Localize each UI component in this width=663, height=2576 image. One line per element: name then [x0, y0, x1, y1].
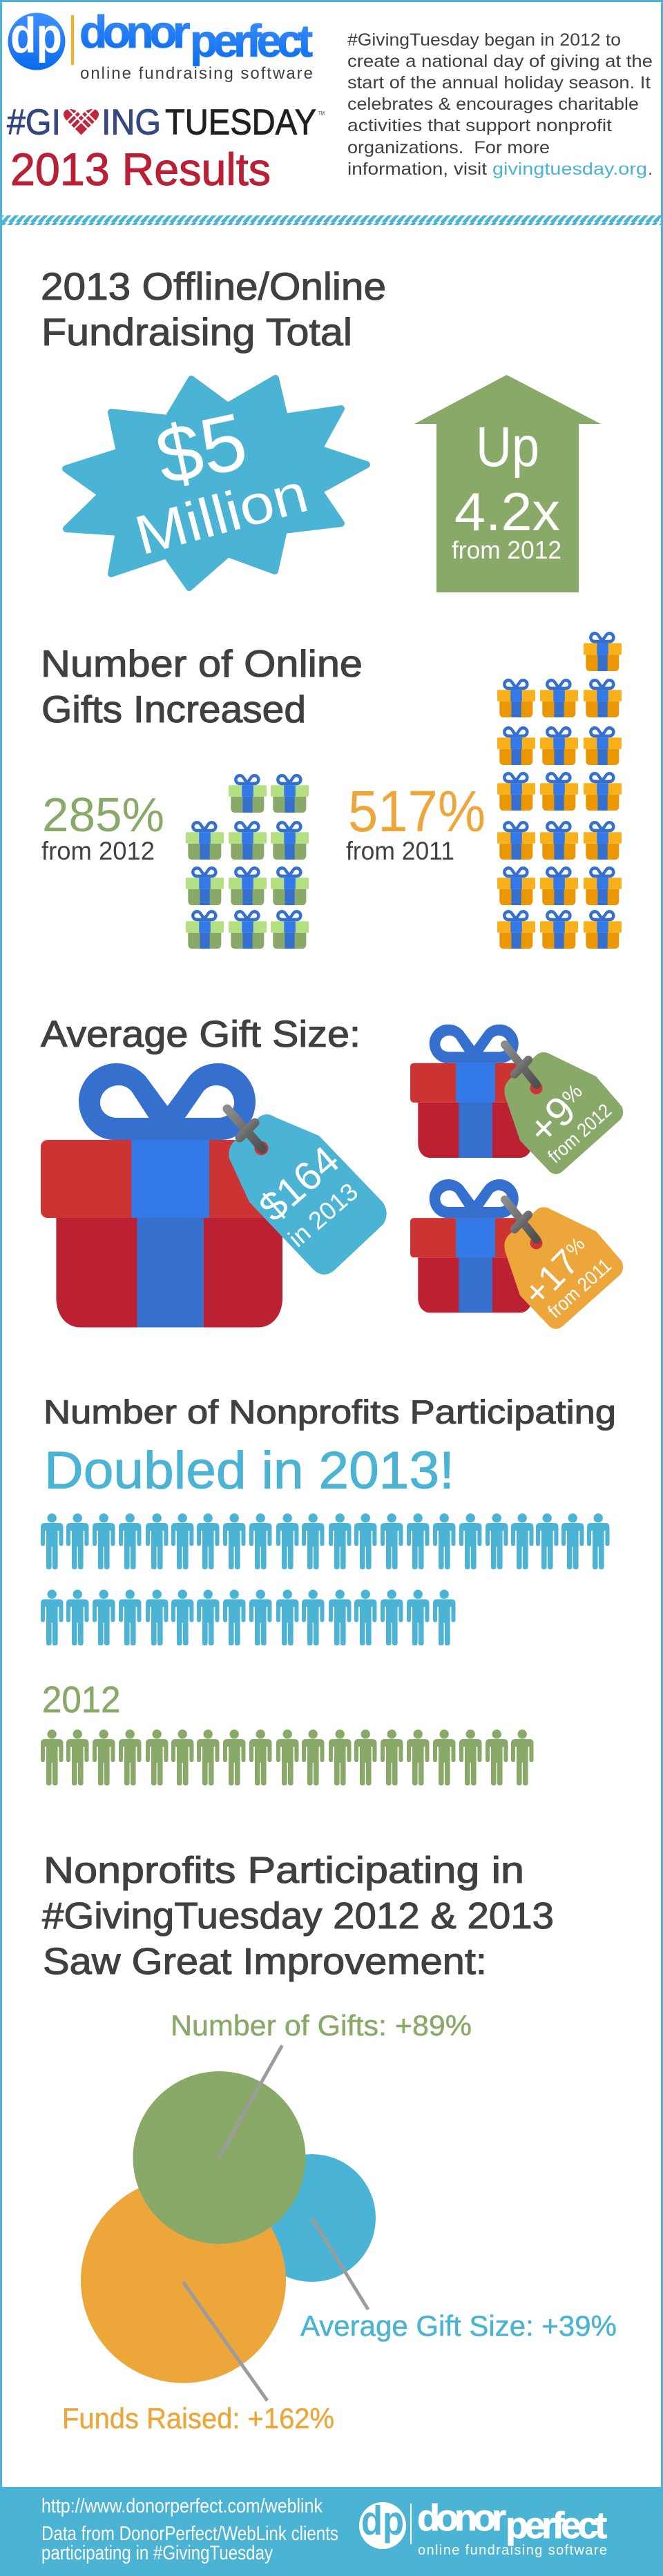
heading: fundraising total	[41, 264, 386, 354]
heading: great improvement: Nonprofits Participating in	[44, 1850, 524, 1891]
pictogram: 2012 nonprofits	[41, 1730, 533, 1785]
heading: online gifts: Number of Online	[41, 642, 363, 685]
heading: great improvement	[42, 1850, 554, 1982]
intro text block: start of the annual holiday season. It	[347, 73, 651, 93]
footer	[0, 2487, 663, 2576]
starburst: $5 million: Million	[128, 462, 314, 566]
label: 2012: 2012	[42, 1679, 120, 1721]
intro text block: organizations. For more	[347, 138, 550, 157]
label: number of gifts: Number of Gifts: +89%	[171, 2009, 472, 2042]
small gift with tag: +17% from 2011: from 2011	[544, 1255, 615, 1322]
footer logo: perfect	[506, 2505, 607, 2546]
logo: DonorPerfect	[8, 6, 313, 83]
bubble: average gift size	[248, 2154, 376, 2282]
heading: nonprofits participating: Number of Nonprofits Participating	[44, 1395, 616, 1431]
intro text block	[347, 30, 653, 179]
intro text block: #GivingTuesday began in 2012 to	[347, 30, 621, 50]
heading: great improvement: #GivingTuesday 2012 & 2013	[42, 1895, 554, 1937]
leader line: funds raised	[183, 2282, 267, 2401]
intro text block: create a national day of giving at the	[347, 52, 653, 71]
label: funds raised: Funds Raised: +162%	[62, 2402, 334, 2434]
logo: DonorPerfect: online fundraising software	[80, 64, 313, 83]
stat: 517% from 2011	[346, 779, 486, 865]
heading: great improvement: Saw Great Improvement:	[43, 1941, 487, 1982]
footer source text: participating in #GivingTuesday	[41, 2542, 273, 2564]
intro text block: celebrates & encourages charitable	[347, 95, 639, 114]
stat: 517% from 2011: 517%	[348, 779, 486, 844]
label: average gift size: Average Gift Size: +39%	[300, 2309, 617, 2342]
heading: fundraising total: Fundraising Total	[41, 310, 352, 354]
footer source text: http://www.donorperfect.com/weblink	[41, 2495, 323, 2517]
footer logo: online fundraising software	[418, 2543, 607, 2558]
big gift with tag: $164 in 2013	[41, 1063, 387, 1327]
footer logo: donor	[417, 2497, 506, 2539]
heading: online gifts: Gifts Increased	[41, 688, 306, 730]
starburst: $5 million: $5	[148, 396, 254, 502]
logo: #GivingTuesday: #GI	[7, 102, 61, 142]
small gift with tag: +17% from 2011: +17	[516, 1242, 587, 1314]
logo: #GivingTuesday: TUESDAY	[165, 102, 316, 142]
arrow: up 4.2x	[414, 375, 601, 592]
starburst: $5 million	[66, 378, 367, 588]
pictogram: 2013 nonprofits, row 2	[41, 1589, 456, 1645]
heading: average gift size: Average Gift Size:	[41, 1014, 361, 1055]
big gift with tag: $164 in 2013: in 2013	[282, 1177, 363, 1252]
title: 2013 Results	[10, 144, 271, 195]
stat: 285% from 2012: 285%	[42, 788, 164, 842]
intro text block: givingtuesday.org	[492, 159, 647, 179]
small gift with tag: +9% from 2012	[410, 1025, 623, 1174]
heading: fundraising total: 2013 Offline/Online	[41, 264, 386, 308]
bubble: number of gifts	[133, 2071, 305, 2244]
footer logo	[359, 2497, 607, 2558]
small gift with tag: +17% from 2011	[410, 1179, 623, 1329]
intro text block: activities that support nonprofit	[347, 116, 612, 135]
small gift with tag: +9% from 2012: %	[558, 1080, 587, 1109]
icon grid: green gifts	[186, 774, 309, 949]
big gift with tag: $164 in 2013: $164	[251, 1137, 348, 1230]
intro text block: information, visit	[347, 159, 487, 179]
intro text block: .	[648, 159, 653, 179]
small gift with tag: +9% from 2012: from 2012	[544, 1099, 615, 1167]
leader line: number of gifts	[219, 2046, 282, 2158]
small gift with tag: +9% from 2012: +9	[519, 1087, 585, 1153]
heading: online gifts	[41, 642, 363, 730]
bubble chart	[62, 2009, 617, 2434]
logo: #GivingTuesday: TM	[318, 110, 325, 117]
logo: DonorPerfect: perfect	[190, 15, 313, 66]
arrow: up 4.2x: from 2012	[452, 536, 561, 564]
stat: 285% from 2012	[41, 788, 164, 865]
footer logo: dp	[361, 2498, 404, 2544]
footer source text	[41, 2495, 338, 2564]
leader line: average gift size	[312, 2218, 368, 2309]
icon grid: orange gifts	[497, 632, 622, 949]
arrow: up 4.2x: Up	[476, 416, 539, 478]
subheading: doubled in 2013: Doubled in 2013!	[44, 1442, 454, 1500]
stat: 285% from 2012: from 2012	[41, 837, 155, 865]
logo: DonorPerfect: dp	[10, 8, 62, 64]
arrow: up 4.2x: 4.2x	[454, 481, 560, 542]
pictogram: 2013 nonprofits, row 1	[41, 1513, 609, 1569]
logo: #GivingTuesday	[7, 109, 325, 135]
stat: 517% from 2011: from 2011	[346, 837, 454, 865]
logo: DonorPerfect: donor	[79, 6, 190, 57]
small gift with tag: +17% from 2011: %	[561, 1233, 589, 1260]
bubble: funds raised	[81, 2178, 286, 2383]
logo: #GivingTuesday: ING	[102, 102, 161, 142]
footer source text: Data from DonorPerfect/WebLink clients	[41, 2523, 338, 2545]
